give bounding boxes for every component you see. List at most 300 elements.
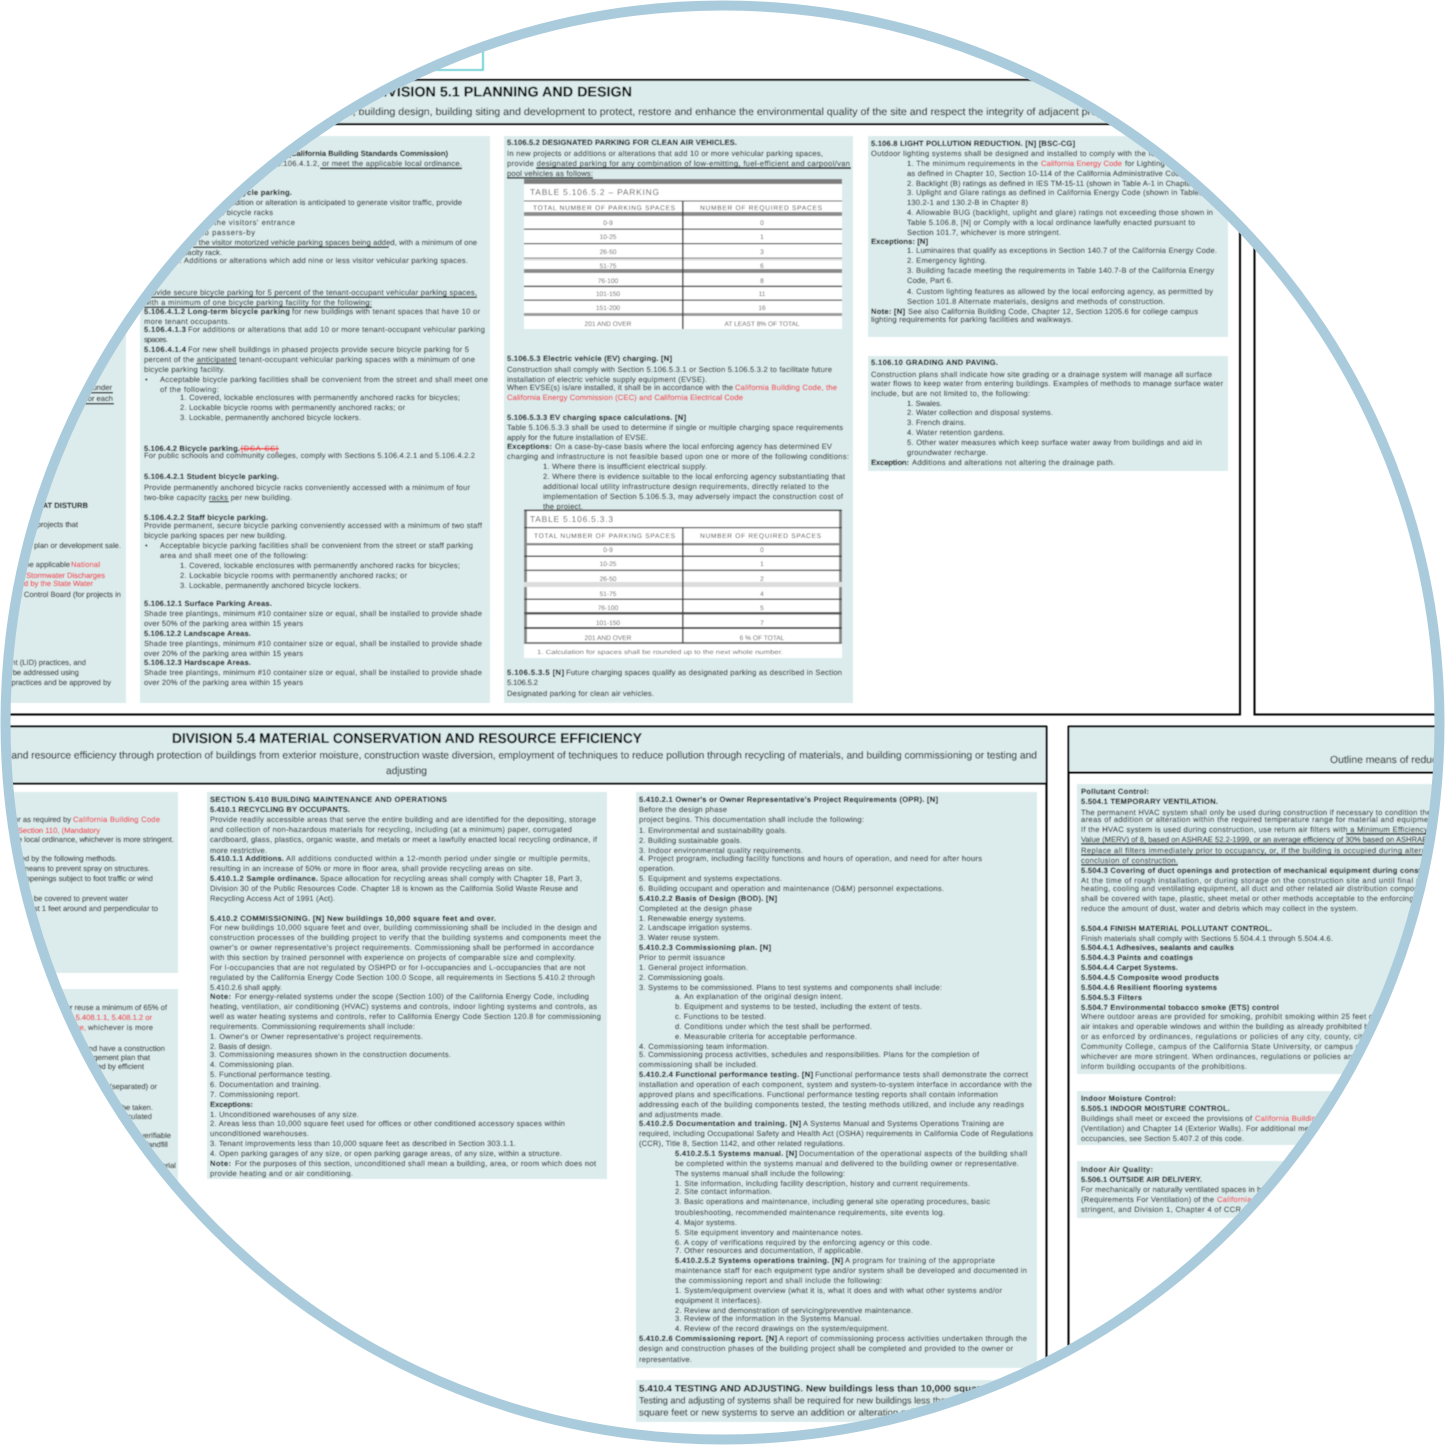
- panel: recycling and commissioning: [207, 792, 607, 1179]
- school bicycle parking: 5.106.4.2 Bicycle parking.: [144, 444, 240, 453]
- panel: clean air vehicle parking and EV charging: provide designated parking for any combination of low-emitting, fuel-efficient and carpool/van: [507, 159, 850, 168]
- long-term bicycle parking: percent of the anticipated tenant-occupant vehicular parking spaces with a minimum of one: [144, 355, 475, 364]
- EV charging text: the project.: [543, 502, 583, 511]
- future charging note: 5.106.5.3.5 [N]: [507, 668, 564, 677]
- owner project requirements: 3. Indoor environmental quality requirements.: [639, 846, 803, 855]
- documentation and training: 2. Site contact information.: [675, 1187, 772, 1196]
- basis of design: Completed at the design phase: [639, 904, 752, 913]
- panel: light pollution reduction: Table 5.106.8, [N] or Comply with a local ordinance lawfully enacted pursuant to: [907, 218, 1195, 227]
- panel: light pollution reduction: 1. Luminaires that qualify as exceptions in Section 140.7 of the California Energy Code.: [907, 246, 1217, 255]
- panel: construction waste: material: [149, 1161, 176, 1170]
- panel: indoor moisture control: Buildings shall meet or exceed the provisions of: [1081, 1114, 1253, 1123]
- future charging note: Designated parking for clean air vehicles.: [507, 689, 654, 698]
- long-term bicycle parking: Acceptable bicycle parking facilities shall be convenient from the street and shall meet one: [160, 375, 488, 384]
- panel: grading and paving: 5. Other water measures which keep surface water away from buildings and aid in: [907, 438, 1202, 447]
- recycling by occupants: resulting in an increase of 50% or more in floor area, shall provide recycling areas on site.: [210, 864, 533, 873]
- temporary ventilation: The permanent HVAC system shall only be used during construction if necessary to condition the build: [1081, 808, 1445, 817]
- table: clean air parking spaces: 6: [760, 263, 764, 270]
- recycling by occupants: Provide readily accessible areas that serve the entire building and are identified for the depositing, storage: [210, 815, 596, 824]
- table: clean air parking spaces: TABLE 5.106.5.2 – PARKING: [530, 187, 659, 197]
- bicycle parking requirements: Comply with Sections 5.106.4.1 and 5.106.4.1.2, or meet the applicable local ordinance.: [144, 159, 462, 168]
- panel: light pollution reduction: California Energy Code: [1041, 159, 1122, 168]
- temporary ventilation: Pollutant Control:: [1081, 787, 1149, 796]
- long-term bicycle parking: •: [145, 375, 148, 384]
- school bicycle parking: two-bike capacity racks per new building.: [144, 493, 292, 502]
- bicycle parking requirements: Exception: Additions or alterations which add nine or less visitor vehicular parking spaces.: [144, 256, 468, 265]
- documentation and training: A Systems Manual and Systems Operations Training are: [803, 1119, 1004, 1128]
- functional performance testing: approved plans and specifications. Functional performance testing reports shall contain information: [639, 1090, 998, 1099]
- commissioning plan: 4. Commissioning team information.: [639, 1042, 769, 1051]
- commissioning: 3. Commissioning measures shown in the construction documents.: [210, 1050, 451, 1059]
- table: clean air parking spaces: 0: [760, 220, 764, 227]
- documentation and training: 2. Review and demonstration of servicing/preventive maintenance.: [675, 1306, 913, 1315]
- section: division 5.1 header: site selection, building design, building siting and development to protect, restore and enhance the environmental quality of the site and respect the integrity of adjacent properties.: [291, 107, 1132, 118]
- finish material pollutant control: [1081, 924, 1333, 1002]
- long-term bicycle parking: bicycle parking facility.: [144, 365, 225, 374]
- shade tree requirements: over 20% of the parking area within 15 years: [144, 678, 303, 687]
- commissioning: 1. Unconditioned warehouses of any size.: [210, 1110, 359, 1119]
- panel: light pollution reduction: [868, 136, 1228, 337]
- long-term bicycle parking: For new shell buildings in phased projects provide secure bicycle parking for 5: [188, 345, 469, 354]
- commissioning: well as water heating systems and controls, refer to California Energy Code Section 120.8 for commissioning: [209, 1012, 601, 1021]
- panel: weather protection: or the local ordinance, whichever is more stringent.: [3, 835, 174, 844]
- table: EV charging spaces: [524, 510, 842, 658]
- long-term bicycle parking: [143, 288, 488, 422]
- owner project requirements: 5. Equipment and systems expectations.: [639, 874, 782, 883]
- recycling by occupants: [210, 795, 598, 903]
- documentation and training: Documentation of the operational aspects of the building shall: [799, 1149, 1027, 1158]
- commissioning: 2. Basis of design.: [210, 1042, 272, 1051]
- panel: light pollution reduction: Section 101.7, whichever is more stringent.: [907, 228, 1061, 237]
- long-term bicycle parking: more tenant occupants.: [144, 317, 230, 326]
- table: clean air parking spaces: 51-75: [600, 263, 617, 270]
- panel: construction waste: whichever is more: [87, 1023, 153, 1032]
- commissioning plan: 5.410.2.3 Commissioning plan. [N]: [639, 943, 771, 952]
- panel: light pollution reduction: lighting requirements for parking facilities and walkways.: [871, 315, 1073, 324]
- section: division 5.4 header: DIVISION 5.4 MATERIAL CONSERVATION AND RESOURCE EFFICIENCY: [172, 730, 643, 746]
- panel: storm water: National: [71, 560, 100, 569]
- recycling by occupants: 5.410.1.2 Sample ordinance.: [210, 874, 318, 883]
- documentation and training: A program for training of the appropriate: [845, 1256, 995, 1265]
- school bicycle parking: [144, 444, 483, 590]
- long-term bicycle parking: 5.106.4.1.2 Long-term bicycle parking: [144, 307, 290, 316]
- panel: testing and adjusting: [636, 1380, 1037, 1422]
- long-term bicycle parking: 2. Lockable bicycle rooms with permanently anchored racks; or: [180, 403, 405, 412]
- table: EV charging spaces: TOTAL NUMBER OF PARKING SPACES: [534, 533, 676, 540]
- documentation and training: 4. Review of the record drawings on the system/equipment.: [675, 1324, 889, 1333]
- bicycle parking requirements: for 5 percent of the visitor motorized vehicle parking spaces being added, with a minimum of one: [144, 238, 477, 247]
- shade tree requirements: 5.106.12.3 Hardscape Areas.: [144, 658, 251, 667]
- owner project requirements: 1. Environmental and sustainability goals.: [639, 826, 787, 835]
- EV charging text: 5.106.5.3.3 EV charging space calculations. [N]: [507, 413, 686, 422]
- covering of duct openings: shall be covered with tape, plastic, sheet metal or other methods acceptable to the enforcing agency to: [1081, 894, 1445, 903]
- commissioning plan: commissioning shall be included.: [639, 1060, 758, 1069]
- table: EV charging spaces: 2: [760, 576, 764, 583]
- commissioning: unconditioned warehouses.: [210, 1129, 309, 1138]
- table: EV charging spaces: 201 AND OVER: [585, 635, 632, 642]
- table: clean air parking spaces: 1: [760, 234, 764, 241]
- panel: construction waste: is verified by efficient: [74, 1062, 145, 1071]
- panel: light pollution reduction: 130.2-1 and 130.2-B in Chapter 8): [907, 198, 1028, 207]
- panel: light pollution reduction: Outdoor lighting systems shall be designed and installed to comply with the following:: [871, 149, 1183, 158]
- functional performance testing: and adjustments made.: [639, 1110, 723, 1119]
- commissioning report: design and construction phases of the building project shall be completed and provided to the owner or: [639, 1344, 1013, 1353]
- bicycle parking requirements: 5.106.4 Bicycle parking. [N] (California Building Standards Commission): [188, 149, 448, 158]
- table: EV charging spaces: 26-50: [600, 576, 617, 583]
- temporary ventilation: conclusion of construction.: [1081, 856, 1178, 865]
- commissioning plan: a. An explanation of the original design intent.: [675, 992, 843, 1001]
- panel: light pollution reduction: 4. Custom lighting features as allowed by the local enforcing agency, as permitted by: [907, 287, 1213, 296]
- school bicycle parking: For public schools and community colleges, comply with Sections 5.106.4.2.1 and 5.106.4.2.2: [144, 451, 475, 460]
- functional performance testing: 5.410.2.4 Functional performance testing. [N]: [639, 1070, 813, 1079]
- recycling by occupants: Division 30 of the Public Resources Code. Chapter 18 is known as the California Solid Waste Reuse and: [210, 884, 578, 893]
- shade tree requirements: 5.106.12.1 Surface Parking Areas.: [144, 599, 272, 608]
- EV charging text: additional local utility infrastructure design requirements, directly related to the: [543, 482, 829, 491]
- commissioning plan: d. Conditions under which the test shall be performed.: [675, 1022, 872, 1031]
- temporary ventilation: 5.504.1 TEMPORARY VENTILATION.: [1081, 797, 1218, 806]
- recycling by occupants: SECTION 5.410 BUILDING MAINTENANCE AND OPERATIONS: [210, 795, 447, 804]
- environmental tobacco smoke: or as enforced by ordinances, regulations or policies of any city, county, city and county, California: [1081, 1032, 1445, 1041]
- table: EV charging spaces: 1: [760, 561, 764, 568]
- commissioning: with this section by trained personnel with experience on projects of comparable size and complexity.: [209, 953, 576, 962]
- long-term bicycle parking: with a minimum of one bicycle parking facility for the following:: [143, 298, 372, 307]
- panel: indoor moisture control: 5.505.1 INDOOR MOISTURE CONTROL.: [1081, 1104, 1230, 1113]
- table: EV charging spaces: 76-100: [598, 605, 619, 612]
- panel: light pollution reduction: as defined in Chapter 10, Section 10-114 of the California Administrative Code; and: [907, 169, 1202, 178]
- commissioning: 3. Tenant improvements less than 10,000 square feet as described in Section 303.1.1.: [210, 1139, 516, 1148]
- panel: testing and adjusting: Testing and adjusting of systems shall be required for new buildings less than 10,000: [639, 1396, 981, 1406]
- finish material pollutant control: 5.504.4.6 Resilient flooring systems: [1081, 983, 1217, 992]
- panel: weather protection: [0, 792, 178, 973]
- EV charging text: charging and infrastructure is not feasible based upon one or more of the following conditions:: [507, 452, 849, 461]
- documentation and training: 1. System/equipment overview (what it is, what it does and with what other systems and/or: [675, 1286, 1002, 1295]
- panel: clean air vehicle parking and EV charging: [504, 136, 853, 703]
- table: EV charging spaces: TABLE 5.106.5.3.3: [530, 514, 613, 524]
- commissioning plan: Prior to permit issuance: [639, 953, 725, 962]
- table: clean air parking spaces: NUMBER OF REQUIRED SPACES: [700, 205, 823, 212]
- panel: construction waste: projects shall prepare and have a construction: [10, 1044, 165, 1053]
- commissioning plan: [639, 943, 980, 1069]
- table: clean air parking spaces: 26-50: [600, 249, 617, 256]
- commissioning: For energy-related systems under the scope (Section 100) of the California Energy Code, including: [235, 992, 589, 1001]
- panel: grading and paving: 2. Water collection and disposal systems.: [907, 408, 1053, 417]
- table: EV charging spaces: 101-150: [596, 620, 620, 627]
- long-term bicycle parking: 3. Lockable, permanently anchored bicycle lockers.: [180, 413, 361, 422]
- commissioning: regulated by the California Energy Code Section 100.0 Scope, all requirements in Sections 5.410.2 through: [210, 973, 595, 982]
- environmental tobacco smoke: [1080, 1003, 1445, 1071]
- commissioning: heating, ventilation, air conditioning (HVAC) systems and controls, indoor lighting systems and controls, as: [210, 1002, 597, 1011]
- panel: storm water: [10, 334, 126, 704]
- panel: construction waste: with Sections 5.408.1.1, 5.408.1.2 or: [28, 1013, 152, 1022]
- panel: indoor moisture control: Indoor Moisture Control:: [1081, 1094, 1176, 1103]
- commissioning plan: b. Equipment and systems to be tested, including the extent of tests.: [675, 1002, 922, 1011]
- panel: grading and paving: Exception:: [871, 458, 909, 467]
- owner project requirements: project begins. This documentation shall include the following:: [639, 815, 864, 824]
- school bicycle parking: •: [145, 541, 148, 550]
- EV charging text: apply for the future installation of EVSE.: [507, 433, 648, 442]
- table: EV charging spaces: 0-9: [603, 547, 613, 554]
- school bicycle parking: 3. Lockable, permanently anchored bicycle lockers.: [180, 581, 361, 590]
- temporary ventilation: [1081, 787, 1445, 866]
- long-term bicycle parking: spaces.: [144, 335, 168, 344]
- documentation and training: 4. Major systems.: [675, 1218, 737, 1227]
- owner project requirements: [639, 795, 982, 893]
- basis of design: 3. Water reuse system.: [639, 933, 720, 942]
- school bicycle parking: Acceptable bicycle parking facilities shall be convenient from the street or staff parking: [160, 541, 473, 550]
- functional performance testing: addressing each of the building components tested, the testing methods utilized, and include any readings: [639, 1100, 1024, 1109]
- panel: clean air vehicle parking and EV charging: pool vehicles as follows:: [507, 169, 593, 178]
- panel: indoor air quality: (Requirements For Ventilation) of the: [1081, 1195, 1214, 1204]
- documentation and training: 5.410.2.5.1 Systems manual. [N]: [675, 1149, 797, 1158]
- school bicycle parking: 1. Covered, lockable enclosures with permanently anchored racks for bicycles;: [180, 561, 460, 570]
- school bicycle parking: Provide permanent, secure bicycle parking conveniently accessed with a minimum of two staff: [144, 521, 483, 530]
- commissioning report: 5.410.2.6 Commissioning report. [N]: [639, 1334, 777, 1343]
- documentation and training: 3. Review of the information in the Systems Manual.: [675, 1314, 862, 1323]
- table: EV charging spaces: 10-25: [600, 561, 617, 568]
- shade tree requirements: over 20% of the parking area within 15 years: [144, 649, 303, 658]
- basis of design: 5.410.2.2 Basis of Design (BOD). [N]: [639, 894, 777, 903]
- table: clean air parking spaces: 76-100: [598, 278, 619, 285]
- shade tree requirements: Shade tree plantings, minimum #10 container size or equal, shall be installed to provide shade: [144, 639, 482, 648]
- panel: grading and paving: include, but are not limited to, the following:: [871, 389, 1030, 398]
- panel: grading and paving: groundwater recharge.: [907, 448, 988, 457]
- commissioning: Note:: [210, 992, 231, 1001]
- panel: construction waste: or verifiable: [132, 1131, 171, 1140]
- panel: weather protection: California Building Code: [73, 815, 160, 824]
- teal corner box: [434, 52, 485, 72]
- long-term bicycle parking: 5.106.4.1.4: [144, 345, 187, 354]
- commissioning: 7. Commissioning report.: [210, 1090, 300, 1099]
- commissioning: 2. Areas less than 10,000 square feet used for offices or other conditioned accessory spaces within: [210, 1119, 565, 1128]
- panel: indoor moisture control: [1077, 1091, 1445, 1145]
- panel: weather protection: at least 1 feet around and perpendicular to: [15, 904, 158, 913]
- commissioning: owner's or owner representative's project requirements. Commissioning shall be performed in accordance: [210, 943, 594, 952]
- owner project requirements: 5.410.2.1 Owner's or Owner Representative's Project Requirements (OPR). [N]: [639, 795, 938, 804]
- panel: indoor air quality: stringent, and Division 1, Chapter 4 of CCR, Title 8.: [1081, 1205, 1271, 1214]
- documentation and training: 6. A copy of verifications required by the enforcing agency or this code.: [675, 1238, 932, 1247]
- bicycle parking requirements: [178, 150, 478, 266]
- panel: construction waste: waste management plan that: [51, 1053, 151, 1062]
- panel: testing and adjusting: 5.410.4 TESTING AND ADJUSTING. New buildings less than 10,000 square feet.: [639, 1384, 1009, 1394]
- long-term bicycle parking: For additions or alterations that add 10 or more tenant-occupant vehicular parking: [188, 325, 485, 334]
- panel: indoor air quality: [1077, 1161, 1445, 1218]
- basis of design: 2. Landscape irrigation systems.: [639, 923, 752, 932]
- recycling by occupants: 5.410.1.1 Additions.: [210, 854, 284, 863]
- table: clean air parking spaces: 10-25: [600, 234, 617, 241]
- panel: light pollution reduction: Exceptions: [N]: [871, 237, 928, 246]
- environmental tobacco smoke: 5.504.7 Environmental tobacco smoke (ETS) control: [1081, 1003, 1279, 1012]
- panel: light pollution reduction: See also California Building Code, Chapter 12, Section 1205.6 for college campus: [908, 307, 1198, 316]
- commissioning: 1. Owner's or Owner representative's project requirements.: [210, 1032, 423, 1041]
- long-term bicycle parking: Provide secure bicycle parking for 5 percent of the tenant-occupant vehicular parking spaces,: [144, 288, 477, 297]
- finish material pollutant control: 5.504.4 FINISH MATERIAL POLLUTANT CONTROL.: [1081, 924, 1272, 933]
- section: division 5.4 header: [10, 724, 1048, 1358]
- table: clean air parking spaces: 101-150: [596, 291, 620, 298]
- table: clean air parking spaces: [524, 179, 842, 329]
- table: clean air parking spaces: 16: [758, 305, 766, 312]
- table: clean air parking spaces: 11: [759, 291, 766, 298]
- school bicycle parking: bicycle parking spaces per new building.: [144, 531, 287, 540]
- panel: construction waste: the landfill: [134, 1140, 168, 1149]
- commissioning: provide heating and or air conditioning.: [210, 1169, 353, 1178]
- table: clean air parking spaces: 151-200: [596, 305, 620, 312]
- table: clean air parking spaces: 3: [760, 249, 764, 256]
- table: EV charging spaces: 1. Calculation for spaces shall be rounded up to the next whole number.: [537, 649, 783, 656]
- table: EV charging spaces: 51-75: [600, 591, 617, 598]
- panel: construction waste: measures to be taken.: [78, 1103, 153, 1112]
- panel: clean air vehicle parking and EV charging: In new projects or additions or alterations that add 10 or more vehicular parking spaces,: [507, 149, 823, 158]
- commissioning plan: c. Functions to be tested.: [675, 1012, 766, 1021]
- table: EV charging spaces: 6 % OF TOTAL: [740, 635, 785, 642]
- recycling by occupants: 5.410.1 RECYCLING BY OCCUPANTS.: [210, 805, 350, 814]
- documentation and training: equipment it interfaces).: [675, 1296, 762, 1305]
- finish material pollutant control: Finish materials shall comply with Sections 5.504.4.1 through 5.504.4.6.: [1081, 934, 1333, 943]
- panel: indoor moisture control: occupancies, see Section 5.407.2 of this code.: [1081, 1134, 1244, 1143]
- environmental tobacco smoke: inform building occupants of the prohibitions.: [1081, 1062, 1247, 1071]
- bicycle parking requirements: two-bike capacity rack.: [144, 248, 222, 257]
- future charging note: [507, 668, 842, 698]
- owner project requirements: 4. Project program, including facility functions and hours of operation, and need for after hours: [639, 854, 982, 863]
- EV charging text: 5.106.5.3 Electric vehicle (EV) charging. [N]: [507, 354, 672, 363]
- long-term bicycle parking: 1. Covered, lockable enclosures with permanently anchored racks for bicycles;: [180, 393, 460, 402]
- panel: grading and paving: 5.106.10 GRADING AND PAVING.: [871, 358, 998, 367]
- owner project requirements: Before the design phase: [639, 805, 727, 814]
- school bicycle parking: 5.106.4.2.1 Student bicycle parking.: [144, 472, 279, 481]
- bicycle parking requirements: readily visible to passers-by: [144, 228, 255, 237]
- functional performance testing: Functional performance tests shall demonstrate the correct: [815, 1070, 1029, 1079]
- EV charging text: Table 5.106.5.3.3 shall be used to determine if single or multiple charging space requirements: [507, 423, 843, 432]
- commissioning report: representative.: [639, 1355, 692, 1364]
- documentation and training: 3. Basic operations and maintenance, including general site operating procedures, basic: [675, 1197, 990, 1206]
- functional performance testing: [639, 1070, 1032, 1119]
- panel: light pollution reduction: 5.106.8 LIGHT POLLUTION REDUCTION. [N] [BSC-CG]: [871, 139, 1075, 148]
- table: clean air parking spaces: 0-9: [603, 220, 613, 227]
- long-term bicycle parking: 5.106.4.1.3: [144, 325, 186, 334]
- EV charging text: On a case-by-case basis where the local enforcing agency has determined EV: [555, 442, 833, 451]
- panel: weather protection: Seal openings subject to foot traffic or wind: [8, 874, 153, 883]
- panel: light pollution reduction: 4. Allowable BUG (backlight, uplight and glare) ratings not exceeding those shown in: [907, 208, 1213, 217]
- EV charging text: 2. Where there is evidence suitable to the local enforcing agency substantiating that: [543, 472, 846, 481]
- panel: pollutant control: [1077, 784, 1445, 1074]
- recycling by occupants: more restrictive.: [210, 846, 267, 855]
- table: clean air parking spaces: 201 AND OVER: [585, 321, 632, 328]
- panel: indoor air quality: Indoor Air Quality:: [1081, 1165, 1153, 1174]
- owner project requirements: operation.: [639, 864, 675, 873]
- school bicycle parking: area and shall meet one of the following:: [160, 551, 308, 560]
- finish material pollutant control: 5.504.4.3 Paints and coatings: [1081, 953, 1193, 962]
- panel: testing and adjusting: square feet or new systems to serve an addition or alteration subject to Section 303.1.: [639, 1408, 1007, 1418]
- commissioning: Note:: [210, 1159, 231, 1168]
- commissioning: [209, 914, 601, 1178]
- finish material pollutant control: 5.504.5.3 Filters: [1081, 993, 1142, 1002]
- table: EV charging spaces: 0: [760, 547, 764, 554]
- functional performance testing: installation and operation of each component, system and system-to-system interface in accordance with the: [639, 1080, 1032, 1089]
- panel: light pollution reduction: 3. Building facade meeting the requirements in Table 140.7-B of the California Energy: [907, 266, 1214, 275]
- shade tree requirements: 5.106.12.2 Landscape Areas.: [144, 629, 251, 638]
- commissioning: 5. Functional performance testing.: [210, 1070, 332, 1079]
- shade tree requirements: over 50% of the parking area within 15 years: [144, 619, 303, 628]
- panel: grading and paving: 4. Water retention gardens.: [907, 428, 1005, 437]
- EV charging text: [507, 354, 849, 511]
- covering of duct openings: reduce the amount of dust, water and debris which may collect in the system.: [1081, 904, 1358, 913]
- bicycle parking requirements: permanently anchored bicycle racks: [144, 208, 273, 217]
- commissioning: Exceptions:: [210, 1100, 253, 1109]
- shade tree requirements: [144, 599, 482, 687]
- panel: light pollution reduction: Section 101.8 Alternate materials, designs and methods of construction.: [907, 297, 1165, 306]
- school bicycle parking: [DSA-SS]: [241, 444, 278, 453]
- shade tree requirements: Shade tree plantings, minimum #10 container size or equal, shall be installed to provide shade: [144, 609, 482, 618]
- basis of design: 1. Renewable energy systems.: [639, 914, 746, 923]
- EV charging text: California Energy Commission (CEC) and California Electrical Code: [507, 393, 743, 402]
- future charging note: 5.106.5.2: [507, 678, 538, 687]
- documentation and training: 5.410.2.5.2 Systems operations training. [N]: [675, 1256, 843, 1265]
- panel: grading and paving: 1. Swales.: [907, 399, 942, 408]
- EV charging text: implementation of Section 5.106.5.3, may adversely impact the construction cost of: [543, 492, 844, 501]
- commissioning plan: 3. Systems to be commissioned. Plans to test systems and components shall include:: [639, 983, 942, 992]
- panel: construction waste: local ordinance,: [33, 1023, 86, 1032]
- commissioning plan: 1. General project information.: [639, 963, 748, 972]
- documentation and training: 7. Other resources and documentation, if applicable.: [675, 1246, 863, 1255]
- future charging note: Future charging spaces qualify as designated parking as described in Section: [566, 668, 842, 677]
- finish material pollutant control: 5.504.4.4 Carpet Systems.: [1081, 963, 1178, 972]
- commissioning: For I-occupancies that are not regulated by OSHPD or for I-occupancies and L-occupancies that are not: [210, 963, 586, 972]
- covering of duct openings: 5.504.3 Covering of duct openings and protection of mechanical equipment during construction.: [1081, 866, 1445, 875]
- panel: construction waste: [62, 988, 178, 1182]
- panel: light pollution reduction: Note: [N]: [871, 307, 905, 316]
- table: EV charging spaces: 5: [760, 605, 764, 612]
- commissioning: 5.410.2 COMMISSIONING. [N] New buildings 10,000 square feet and over.: [210, 914, 496, 923]
- school bicycle parking: Provide permanently anchored bicycle racks conveniently accessed with a minimum of four: [144, 483, 470, 492]
- table: EV charging spaces: 7: [760, 620, 764, 627]
- commissioning: For new buildings 10,000 square feet and over, building commissioning shall be included in the design and: [210, 923, 597, 932]
- panel: grading and paving: water flows to keep water from entering buildings. Examples of methods to manage surface water: [870, 379, 1223, 388]
- section: division 5.1 header: DIVISION 5.1 PLANNING AND DESIGN: [373, 84, 632, 100]
- temporary ventilation: areas of addition or alteration within the required temperature range for material and equipment inst: [1081, 815, 1445, 824]
- commissioning plan: 5. Commissioning process activities, schedules and responsibilities. Plans for the completion of: [639, 1050, 980, 1059]
- documentation and training: troubleshooting, recommended maintenance requirements, site events log.: [675, 1208, 945, 1217]
- panel: light pollution reduction: for Lighting Zones 1-4: [1125, 159, 1203, 168]
- commissioning: 4. Commissioning plan.: [210, 1060, 294, 1069]
- panel: indoor air quality: 5.506.1 OUTSIDE AIR DELIVERY.: [1081, 1175, 1202, 1184]
- owner project requirements: 6. Building occupant and operation and maintenance (O&M) personnel expectations.: [639, 884, 944, 893]
- commissioning: 6. Documentation and training.: [210, 1080, 321, 1089]
- commissioning: For the purposes of this section, unconditioned shall mean a building, area, or room which does not: [235, 1159, 597, 1168]
- panel: owner requirements and commissioning detail: [636, 792, 1037, 1368]
- documentation and training: the commissioning report and shall include the following:: [675, 1276, 882, 1285]
- EV charging text: 1. Where there is insufficient electrical supply.: [543, 462, 707, 471]
- commissioning: 4. Open parking garages of any size, or open parking garage areas, of any size, within a structure.: [210, 1149, 562, 1158]
- documentation and training: The systems manual shall include the following:: [675, 1169, 845, 1178]
- documentation and training: required, including Occupational Safety and Health Act (OSHA) requirements in California Code of Regulations: [639, 1129, 1033, 1138]
- commissioning: construction processes of the building project to verify that the building systems and components meet the: [210, 933, 601, 942]
- documentation and training: 5.410.2.5 Documentation and training. [N]: [639, 1119, 801, 1128]
- commissioning: 5.410.2.6 shall apply.: [210, 983, 282, 992]
- commissioning report: A report of commissioning process activities undertaken through the: [779, 1334, 1027, 1343]
- long-term bicycle parking: of the following:: [160, 385, 219, 394]
- commissioning report: [639, 1334, 1027, 1364]
- commissioning plan: 2. Commissioning goals.: [639, 973, 725, 982]
- documentation and training: maintenance staff for each equipment type and/or system shall be developed and documented in: [675, 1266, 1027, 1275]
- documentation and training: be completed within the systems manual and delivered to the building owner or representative.: [675, 1159, 1019, 1168]
- panel: light pollution reduction: 3. Uplight and Glare ratings as defined in California Energy Code (shown in Tables: [907, 188, 1203, 197]
- panel: bicycle parking: [140, 136, 490, 703]
- commissioning plan: e. Measurable criteria for acceptable performance.: [675, 1032, 857, 1041]
- panel: construction waste: are calculated: [105, 1112, 152, 1121]
- panel: construction waste: bulk mixed (separated) or: [71, 1082, 157, 1091]
- finish material pollutant control: 5.504.4.5 Composite wood products: [1081, 973, 1219, 982]
- EV charging text: installation of electric vehicle supply equipment (EVSE).: [507, 375, 707, 384]
- section: division 5.5 header: [1066, 724, 1434, 1346]
